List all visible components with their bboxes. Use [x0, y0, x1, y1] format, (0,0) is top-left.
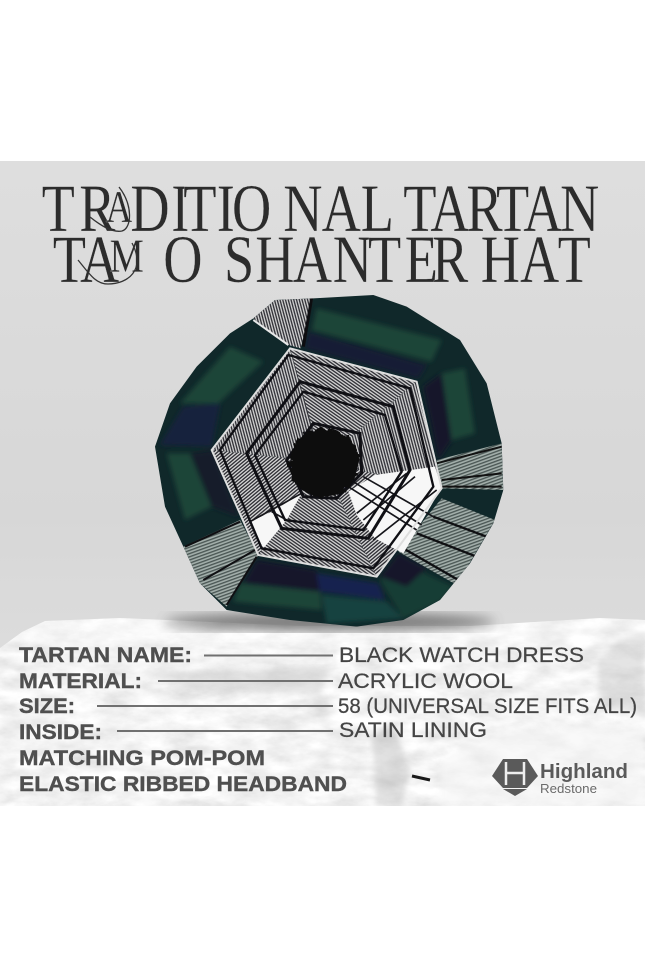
connector lines — [97, 656, 333, 731]
spec labels: MATERIAL: — [19, 670, 142, 693]
spec labels: TARTAN NAME: — [19, 644, 192, 667]
icon: diamond monogram — [492, 759, 538, 796]
title line 2: TA — [53, 222, 119, 297]
title line 2: SHANTER — [224, 222, 468, 297]
title line 1: TARTAN — [403, 171, 599, 246]
title — [42, 171, 599, 297]
title line 1: A — [106, 182, 132, 233]
title line 2: O — [163, 222, 202, 297]
spec labels: ELASTIC RIBBED HEADBAND — [19, 773, 347, 796]
white blocks — [348, 467, 442, 553]
logo — [492, 759, 628, 796]
spec labels: SIZE: — [19, 695, 75, 718]
plaid gray bands — [253, 298, 313, 348]
title line 1: DITIONAL — [130, 171, 394, 246]
title line 1: TR — [42, 171, 115, 246]
spec values: 58 (UNIVERSAL SIZE FITS ALL) — [338, 695, 637, 718]
title swashes — [78, 187, 137, 284]
title line 2: HAT — [481, 222, 591, 297]
spec values: BLACK WATCH DRESS — [339, 644, 584, 667]
plaid rings — [212, 348, 442, 577]
spec values: ACRYLIC WOOL — [338, 670, 513, 693]
spec table — [19, 644, 637, 796]
spec values — [338, 644, 637, 742]
title line 2: M — [110, 230, 144, 283]
brand name: Highland — [540, 761, 628, 783]
outer plaid patches — [160, 308, 475, 623]
hat shadow — [165, 613, 495, 631]
tartan hat — [155, 295, 504, 627]
spec labels: INSIDE: — [19, 721, 102, 744]
spec labels: MATCHING POM-POM — [19, 747, 265, 770]
rock pedestal — [0, 610, 645, 806]
hatched centre sectors — [290, 350, 416, 438]
spec labels — [19, 644, 347, 796]
spec values: SATIN LINING — [339, 719, 487, 742]
background panel — [0, 161, 645, 806]
infographic canvas — [0, 161, 645, 806]
icon: pom-pom — [289, 428, 359, 497]
brand sub-name: Redstone — [540, 781, 597, 796]
